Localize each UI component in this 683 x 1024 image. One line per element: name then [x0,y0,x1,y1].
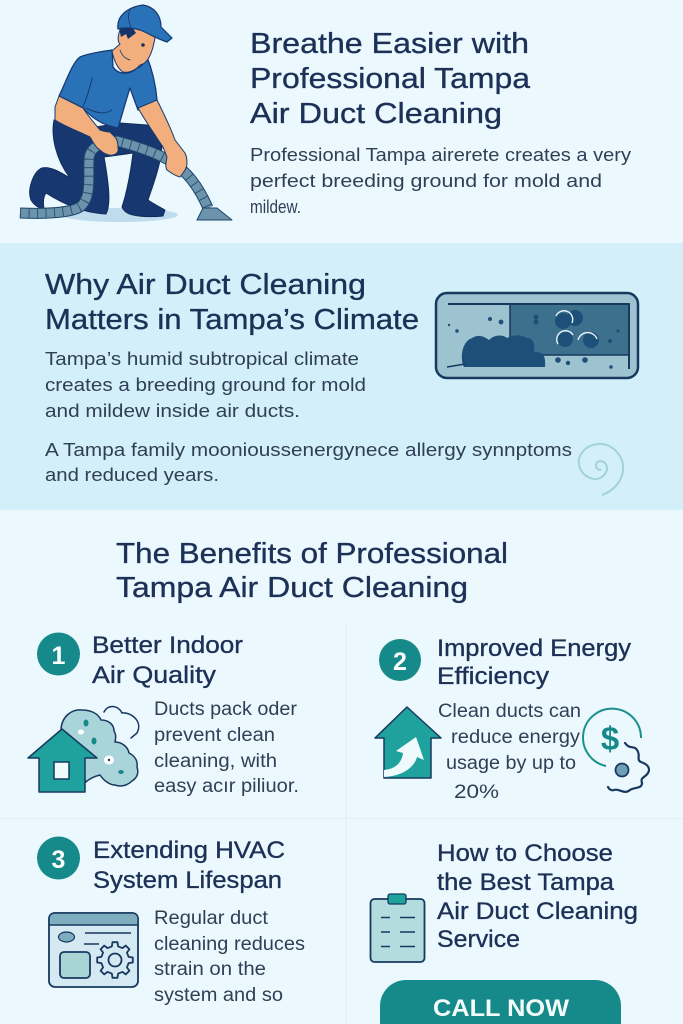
shirt [59,50,157,128]
heading: card 3 title [93,837,285,894]
text: hero description: Professional Tampa airerete creates a very [250,144,632,165]
heading: benefits title [116,538,508,604]
text: card 3 description: cleaning reduces [154,934,305,955]
icon: moldy air duct [436,293,638,378]
text: card 3 description: Regular duct [154,908,269,929]
text: card 1 description: cleaning, with [154,751,277,772]
text: climate description: and mildew inside air ducts. [45,400,300,421]
text: hero description [250,144,632,217]
heading: climate section title: Why Air Duct Cleaning [45,269,366,301]
heading: climate section title [45,269,419,336]
card: improved energy efficiency [375,635,649,803]
text: hero description: perfect breeding ground for mold and [250,170,602,191]
icon: house with dirty cloud [28,706,139,792]
panel: benefits [0,538,683,1024]
heading: card 1 title: Air Quality [92,662,216,689]
heading: card 3 title: Extending HVAC [93,837,285,864]
text: family example [45,439,572,485]
button: call now: CALL NOW [433,995,569,1022]
cap [118,5,172,42]
panel: hero [20,5,632,222]
card: better indoor air quality [28,632,299,797]
text: climate description: creates a breeding ground for mold [45,374,366,395]
text: card 2 description: usage by up to [446,753,576,774]
heading: card 4 title: Air Duct Cleaning [437,898,638,925]
text: card 3 description [154,908,305,1006]
heading: hero title: Breathe Easier with [250,28,529,60]
text: card 3 description: strain on the [154,959,266,980]
heading: card 4 title: the Best Tampa [437,869,615,896]
card: how to choose a service [370,840,638,1024]
heading: benefits title: The Benefits of Professional [116,538,508,570]
panel: why air duct cleaning matters [0,243,683,510]
hose [20,141,208,213]
text: card 2 description: reduce energy [451,727,581,748]
text: card 1 description: Ducts pack oder [154,699,298,720]
icon: clipboard checklist [370,894,424,962]
heading: benefits title: Tampa Air Duct Cleaning [116,572,468,604]
text: family example: A Tampa family moonioussenergynece allergy synnptoms [45,439,572,460]
heading: card 1 title [92,632,243,689]
card: extending hvac system lifespan [37,836,305,1006]
text: climate description: Tampa’s humid subtropical climate [45,348,359,369]
icon: dollar and gear [583,709,649,792]
badge: number 1 [37,632,80,676]
text: card 1 description: prevent clean [154,725,275,746]
heading: card 2 title [437,635,631,690]
heading: card 4 title: How to Choose [437,840,613,867]
icon: control panel with gear [49,913,138,987]
text: card 2 description: 20% [454,782,499,803]
button: call now [380,980,621,1024]
icon: house with upward arrow [375,707,441,778]
text: climate description [45,348,366,421]
icon: air swirl [579,444,623,495]
head [112,27,155,72]
heading: hero title [250,28,530,130]
badge: number 3: 3 [52,846,65,874]
heading: card 4 title: Service [437,926,520,953]
badge: number 2: 2 [393,648,407,676]
text: card 3 description: system and so [154,985,283,1006]
text: family example: and reduced years. [45,464,219,485]
heading: card 4 title [437,840,638,953]
badge: number 1: 1 [52,642,66,670]
heading: hero title: Professional Tampa [250,63,530,95]
text: hero description: mildew. [250,196,301,217]
arms [55,96,118,155]
heading: hero title: Air Duct Cleaning [250,98,502,130]
text: card 2 description: Clean ducts can [438,701,581,722]
icon: dollar and gear: $ [601,720,619,757]
trousers [30,120,165,217]
heading: card 1 title: Better Indoor [92,632,243,659]
text: card 1 description [154,699,299,797]
heading: card 2 title: Improved Energy [437,635,631,662]
text: card 2 description [438,701,581,803]
heading: card 2 title: Efficiency [437,663,549,690]
heading: card 3 title: System Lifespan [93,867,282,894]
badge: number 3 [37,836,80,880]
illustration: technician kneeling with duct hose [20,5,232,222]
heading: climate section title: Matters in Tampa’s Climate [45,304,419,336]
badge: number 2 [379,639,421,681]
text: card 1 description: easy acır piliuor. [154,776,299,797]
